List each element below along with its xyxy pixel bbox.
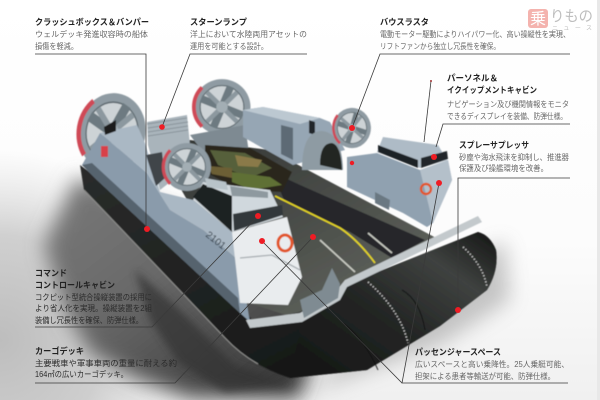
- bow skirt highlight: [290, 232, 497, 378]
- watermark logo: 乗: [530, 10, 546, 28]
- label: passenger space: 担架による患者等輸送が可能、防弾仕様。: [415, 371, 555, 381]
- sidewall top: [100, 125, 240, 262]
- label: crush box and bumper: クラッシュボックス＆バンパー: [35, 17, 149, 27]
- cargo deck: [150, 135, 482, 318]
- fan: rear left: [72, 88, 152, 176]
- label: spray suppressor: スプレーサプレッサ: [459, 140, 529, 150]
- bow ramp hardware: [300, 268, 340, 318]
- watermark logo: りもの: [550, 8, 593, 25]
- watermark logo: ニュース: [552, 25, 592, 32]
- left sidewall side face: [82, 133, 250, 322]
- label: passenger space: パッセンジャースペース: [415, 347, 501, 357]
- front cabin: [193, 178, 302, 305]
- ground shadow core: [135, 270, 292, 392]
- fan: front left: [163, 143, 211, 191]
- right sidewall and cabin: [347, 137, 452, 227]
- fan base: [190, 125, 250, 160]
- leader lines: [35, 54, 570, 383]
- fan: rear centre: [194, 79, 250, 135]
- label: spray suppressor: 砂塵や海水飛沫を抑制し、推進器: [459, 152, 569, 162]
- vent opening: [146, 152, 165, 186]
- label: stern ramp: 運用を可能とする設計。: [190, 41, 268, 51]
- label: crush box and bumper: ウェルデッキ発進収容時の船体: [35, 29, 148, 39]
- label: personnel and equipment cabin: パーソネル＆: [447, 73, 498, 83]
- fan: right: [332, 106, 372, 150]
- label: personnel and equipment cabin: ナビゲーション及び機関情報をモニタ: [447, 99, 569, 109]
- right cabin life ring: [421, 184, 431, 194]
- label: stern ramp: [190, 17, 307, 51]
- label: crush box and bumper: [35, 17, 149, 51]
- callout markers: [144, 80, 461, 313]
- label: command control cabin: 装備し冗長性を確保、防弾仕様。: [35, 315, 143, 325]
- black skirt: [80, 165, 497, 378]
- label: spray suppressor: 保護及び操艦環境を改善。: [459, 163, 548, 173]
- watermark logo: [528, 8, 593, 32]
- deck dark lane: [272, 172, 425, 258]
- centre equipment block: [243, 107, 345, 165]
- label: personnel and equipment cabin: イクイップメントキャビン: [447, 85, 537, 95]
- bow rail: [246, 216, 482, 328]
- label: cargo deck: [35, 346, 177, 379]
- ramp ribs: [147, 118, 188, 136]
- label: crush box and bumper: 損傷を軽減。: [35, 41, 78, 51]
- label: spray suppressor: [459, 140, 569, 173]
- skirt lower lip: [84, 190, 258, 364]
- label: command control cabin: コントロールキャビン: [35, 280, 115, 290]
- label: stern ramp: 洋上において水陸両用アセットの: [190, 29, 307, 39]
- label: bow thruster: バウスラスタ: [380, 17, 429, 27]
- label: command control cabin: コマンド: [35, 268, 67, 278]
- rear hatch: [104, 120, 116, 135]
- skirt stitching: [368, 247, 487, 343]
- tank: [205, 145, 292, 192]
- hovercraft illustration: [72, 79, 497, 378]
- label: cargo deck: カーゴデッキ: [35, 346, 84, 356]
- label: command control cabin: より省人化を実現。操縦装置を2組: [35, 303, 152, 313]
- label: command control cabin: コクピット型統合操縦装置の採用に: [35, 292, 152, 302]
- arched shelter: [302, 131, 343, 170]
- ground shadow: [44, 178, 330, 398]
- label: passenger space: 広いスペースと高い乗降性。25人乗艇可能、: [415, 359, 569, 369]
- white deck stripes: [320, 233, 392, 272]
- front cabin life ring: [278, 235, 292, 251]
- label: personnel and equipment cabin: [447, 73, 569, 121]
- label: bow thruster: 電動モーター駆動によりハイパワー化、高い操縦性を実現、: [380, 29, 570, 39]
- skirt seams: [343, 290, 425, 370]
- label: cargo deck: 164㎡の広いカーゴデッキ。: [35, 369, 128, 379]
- ensign: [101, 146, 108, 157]
- ground shadow: far side glow: [310, 240, 510, 392]
- label: passenger space: [415, 347, 569, 381]
- label: cargo deck: 主要戦車や軍事車両の重量に耐える約: [35, 358, 177, 368]
- label: bow thruster: リフトファンから独立し冗長性を確保。: [380, 41, 500, 51]
- label: command control cabin: [35, 268, 152, 325]
- sidewall lower shade: [82, 163, 240, 313]
- label: bow thruster: [380, 17, 570, 51]
- label: personnel and equipment cabin: できるディスプレイを装備、防弾仕様。: [447, 111, 567, 121]
- label: stern ramp: スターンランプ: [190, 17, 247, 27]
- stern ramp: [147, 115, 192, 190]
- yellow deck line: [275, 196, 375, 263]
- hull number: 2101: [203, 230, 228, 252]
